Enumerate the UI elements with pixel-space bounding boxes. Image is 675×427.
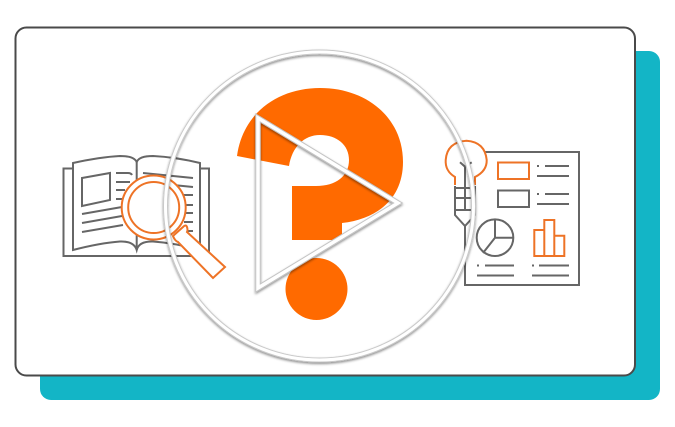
report page [465,152,579,285]
book outline [64,156,209,256]
play button overlay [166,52,474,360]
teal offset panel [40,51,660,400]
question mark hook [237,88,403,240]
white video card [16,28,635,376]
light bulb [446,141,487,185]
orange box [498,162,529,179]
pie chart [477,219,513,256]
play button ring [166,52,474,360]
bulb base and pencil [455,162,475,232]
text lines [477,166,569,276]
play triangle [258,118,398,288]
large orange question mark [237,88,403,320]
magnifier [122,176,225,278]
bar chart [534,220,564,256]
grey box [498,190,529,207]
icon: report page with light bulb [446,141,579,285]
icon: open book with magnifier [64,156,225,278]
question mark dot [286,258,348,320]
